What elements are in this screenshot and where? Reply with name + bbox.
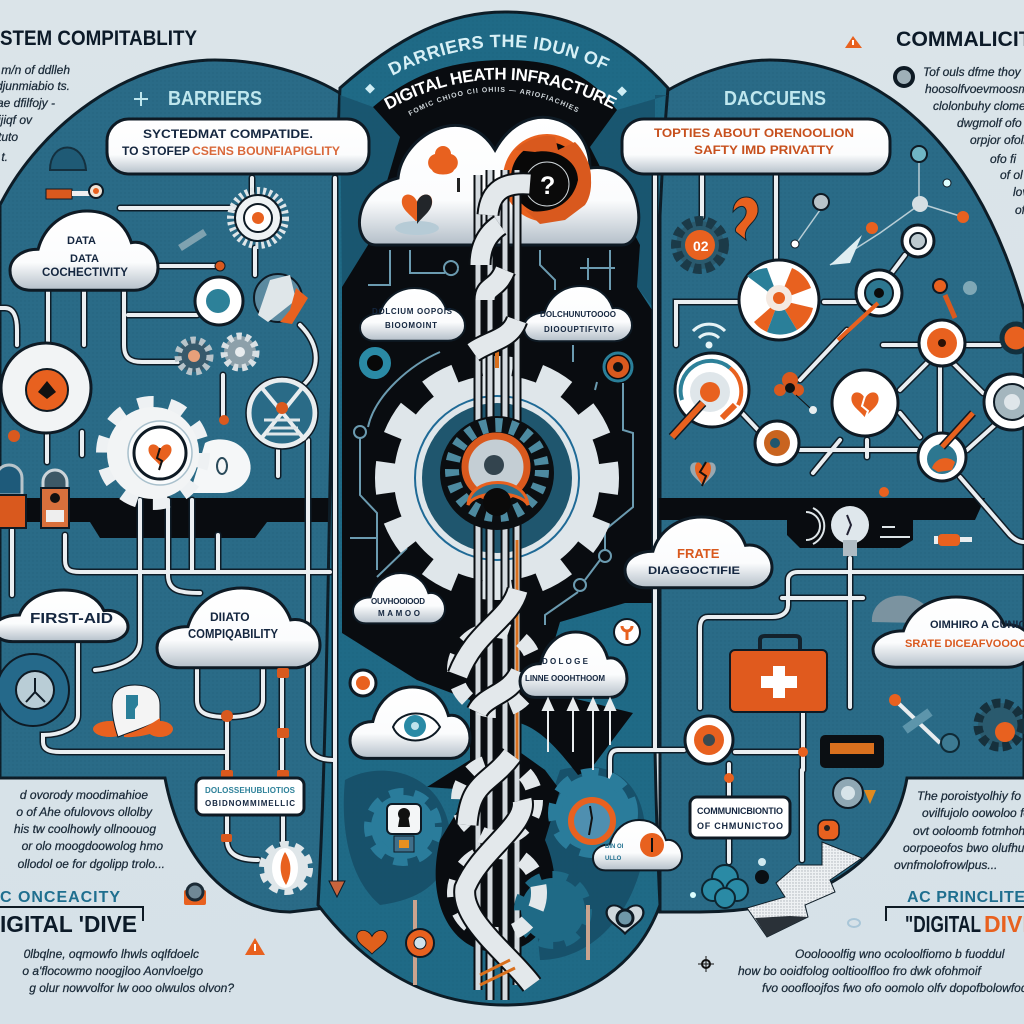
right pipes	[610, 176, 1024, 862]
cloud: frate: DIAGGOCTIFIE	[648, 565, 740, 577]
big gear	[389, 370, 605, 586]
gear: orange question	[507, 136, 591, 224]
icons: padlocks	[0, 465, 69, 528]
icon: keyhole	[387, 804, 421, 852]
left closing paragraph: o a'flocowmo noogjloo Aonvloelgo	[22, 964, 203, 978]
node: heart disc	[832, 370, 898, 436]
right closing paragraph: Ooolooolfig wno ocoloolfiomo b fuoddul	[795, 947, 1005, 961]
pill: system compatibility: CSENS BOUNFIAPIGLITY	[192, 144, 340, 158]
right lower paragraph: ovnfmolofrowlpus...	[894, 858, 997, 872]
chart: pie disc	[739, 260, 819, 340]
title banner center: DARRIERS THE IDUN OF	[388, 34, 610, 76]
black band left	[25, 498, 335, 538]
heading: discussions: DACCUENS	[724, 88, 826, 110]
cloud: data compatibility	[157, 588, 320, 668]
cloud: first aid: FIRST-AID	[30, 610, 113, 627]
node: eye disc	[838, 270, 902, 340]
cloud: small lower right: ULLO	[605, 856, 622, 862]
pipes center	[478, 170, 517, 1000]
node: top disc	[902, 225, 934, 257]
small gears	[178, 336, 256, 372]
panel: left barriers	[0, 60, 350, 912]
cloud: eye	[350, 687, 470, 758]
black band right	[640, 498, 985, 548]
heart dark half	[417, 194, 432, 224]
icon: eye disc	[195, 277, 243, 325]
icon: ring small bottom right	[848, 919, 860, 927]
stipple halos around lower gears	[344, 767, 646, 960]
left closing paragraph: g olur nowvolfor lw ooo olwulos olvon?	[29, 981, 234, 995]
node: orange link	[933, 279, 977, 318]
icon: knob orange	[215, 261, 229, 425]
orange ring: lower right	[571, 800, 613, 842]
icon: orange user	[93, 685, 173, 737]
icon: lock bottom left	[184, 884, 206, 905]
digital divide right: "DIGITAL	[905, 911, 981, 937]
title: left system compatibility: STEM COMPITABLITY	[0, 27, 197, 50]
cloud: frate: FRATE	[677, 546, 720, 561]
icon: wifi	[693, 324, 725, 347]
left lower paragraph: o of Ahe ofulovovs ollolby	[16, 805, 153, 819]
icon: wrench	[889, 694, 959, 752]
cloud: center lower right	[520, 632, 627, 697]
icon: clock disc	[0, 654, 69, 726]
left lower paragraph: ollodol oe for dgolipp trolo...	[18, 857, 165, 871]
icon: orange bug	[774, 372, 817, 414]
pipe joints left	[221, 668, 289, 842]
icon: star bottom	[698, 956, 714, 972]
rings	[363, 351, 632, 381]
left lower paragraph: his tw coolhowly ollnoouog	[14, 822, 156, 836]
right lower paragraph: The poroistyolhiy fo	[917, 789, 1021, 803]
left top paragraph	[0, 63, 70, 164]
gear: right top orange: 02	[693, 238, 709, 254]
cloud: center mid left: DOLCIUM OOPOIS	[372, 307, 453, 316]
heading: opacity left: C ONCEACITY	[0, 889, 120, 906]
network top right	[791, 146, 969, 265]
title banner center: DIGITAL HEATH INFRACTURE	[384, 68, 618, 110]
title banner center	[365, 34, 627, 116]
icon: globe gear	[254, 274, 308, 324]
right closing paragraph: fvo ooofloojfos fwo ofo oomolo olfv dopofbolowfod	[762, 981, 1024, 995]
icon: brain	[702, 865, 748, 908]
right top paragraph	[923, 65, 1024, 217]
cloud: first aid	[0, 590, 128, 642]
black circuit lines	[350, 250, 633, 625]
right lower paragraph	[894, 789, 1024, 872]
left top paragraph: t.	[1, 150, 8, 164]
cloud: center mid right: DIOOUPTIFVITO	[544, 325, 614, 334]
icon: orange ring small	[350, 670, 376, 696]
icon: half heart	[402, 194, 432, 222]
right closing paragraph	[738, 947, 1024, 995]
gear: top left	[231, 191, 285, 245]
icon: lightbulb	[806, 506, 910, 556]
icon: first aid case	[730, 636, 827, 712]
cloud: center mid right	[524, 286, 632, 341]
node: lower left disc	[755, 421, 799, 465]
cloud: frate	[625, 517, 772, 588]
right top paragraph: ofo fi	[990, 152, 1016, 166]
icon: orange figure	[428, 146, 458, 174]
shaded upper wedges	[340, 95, 668, 310]
cloud: right mid	[872, 596, 1024, 667]
cloud: center top	[359, 117, 639, 245]
label box: left lower	[196, 778, 304, 815]
icon: warning bottom left	[245, 938, 265, 955]
label box: right lower	[690, 797, 790, 838]
digital divide right	[886, 907, 1024, 937]
cloud: center lower right: DOLOGE	[542, 657, 589, 666]
right closing paragraph: how bo ooidfolog ooltioolfloo fro dwk ofohmoif	[738, 964, 982, 978]
icon: warning top right	[845, 36, 862, 48]
pill: safety and privacy: SAFTY IMD PRIVATTY	[694, 143, 834, 157]
center black field	[342, 60, 652, 952]
pin	[457, 178, 460, 192]
pill: system compatibility: SYCTEDMAT COMPATIDE.	[143, 127, 313, 141]
gear: edge top right	[1002, 324, 1024, 352]
label box: left lower: DOLOSSEHUBLIOTIOS	[205, 786, 296, 795]
pill: system compatibility	[107, 119, 369, 174]
heading: principle right: AC PRINCLITE	[907, 889, 1024, 906]
panel: right discussions	[640, 60, 1024, 912]
left top paragraph: m/n of ddlleh	[1, 63, 70, 77]
right lower paragraph: oorpoeofos bwo olufhu	[903, 841, 1024, 855]
icon: orange disc on cloud	[614, 619, 640, 645]
gear: far right	[978, 703, 1022, 747]
pill: safety and privacy: TOPTIES ABOUT ORENOOLION	[654, 126, 854, 140]
node: lower right disc	[918, 413, 973, 481]
cloud: data compatibility: COMPIQABILITY	[188, 626, 278, 641]
pill: system compatibility: TO STOFEP	[122, 144, 190, 158]
gear: right top orange	[676, 221, 724, 269]
icon: valve	[833, 778, 876, 808]
node: orange disc upper right	[919, 320, 965, 366]
panel: center column	[318, 12, 668, 1005]
gear: heart	[105, 405, 251, 501]
label box: left lower: OBIDNOMMIMELLIC	[205, 799, 295, 808]
hub: big gear center	[440, 416, 554, 530]
cloud: center mid left	[360, 288, 465, 341]
left lower paragraph: or olo moogdoowolog hmo	[22, 839, 163, 853]
title banner center: FOMIC CHIOO CII OHIIS — ARIOFIACHIES	[408, 86, 578, 116]
cloud: data compatibility: DIIATO	[210, 610, 250, 624]
icon: joint right	[724, 747, 808, 783]
cloud: data connectivity: COCHECTIVITY	[42, 265, 128, 279]
small items top left	[46, 92, 205, 248]
right top paragraph: dwgmolf ofo	[957, 116, 1022, 130]
icon: struck circle	[246, 377, 318, 449]
pipes lower: stems	[415, 900, 588, 985]
icon: ring top right	[895, 68, 913, 86]
arrows: up	[543, 699, 615, 770]
icon: small orange gadget	[879, 487, 972, 546]
cloud: small lower right	[593, 820, 682, 870]
cloud: center lower left: MAMOO	[378, 609, 420, 618]
label box: right lower: COMMUNICBIONTIO	[697, 806, 783, 816]
icon: broken heart	[690, 462, 716, 486]
pill: safety and privacy	[622, 119, 890, 174]
heading: barriers: BARRIERS	[168, 88, 262, 110]
cloud: center lower right: LINNE OOOHTHOOM	[525, 674, 605, 683]
label box: right lower: OF CHMUNICTOO	[697, 821, 783, 831]
gears: lower teal	[371, 775, 631, 942]
icons: hearts lower	[357, 905, 643, 957]
cloud: center lower left	[353, 573, 445, 623]
icon: lightning stipple	[747, 842, 862, 937]
left pipes	[0, 178, 335, 882]
right top paragraph: of ol	[1000, 168, 1023, 182]
node: target	[672, 353, 749, 437]
node: orange eye	[685, 716, 733, 764]
left lower paragraph	[14, 788, 165, 871]
node: orange disc	[1, 343, 91, 442]
cloud: data connectivity: DATA	[67, 235, 96, 247]
left closing paragraph: 0lbqlne, oqmowfo lhwls oqlfdoelc	[24, 947, 199, 961]
heart base	[395, 221, 439, 235]
digital divide left: IGITAL 'DIVE	[0, 911, 137, 937]
cloud: center lower left: OUVHOOIOOD	[371, 597, 425, 606]
left lower paragraph: d ovorody moodimahioe	[20, 788, 148, 802]
cloud: data connectivity	[10, 211, 158, 290]
device: dark panel	[820, 735, 884, 768]
node: far right disc	[984, 374, 1024, 430]
arrow: left long down	[329, 881, 345, 897]
cloud: center mid left: BIOOMOINT	[385, 321, 437, 330]
gear: orange flame	[264, 846, 308, 890]
dots lower right	[690, 858, 769, 898]
gear: orange question: ?	[540, 172, 555, 200]
right top paragraph: Tof ouls dfme thoy	[923, 65, 1022, 79]
ribbon: center helix	[458, 184, 532, 985]
cloud: center mid right: DOLCHUNUTOOOO	[540, 310, 616, 319]
cloud: small lower right: BIN OI	[605, 844, 624, 850]
icon: orange question	[733, 197, 758, 240]
icon: orange lock	[818, 820, 839, 840]
cloud: data connectivity: DATA	[70, 253, 99, 265]
left closing paragraph	[22, 947, 234, 995]
gears: white lower	[455, 630, 539, 935]
